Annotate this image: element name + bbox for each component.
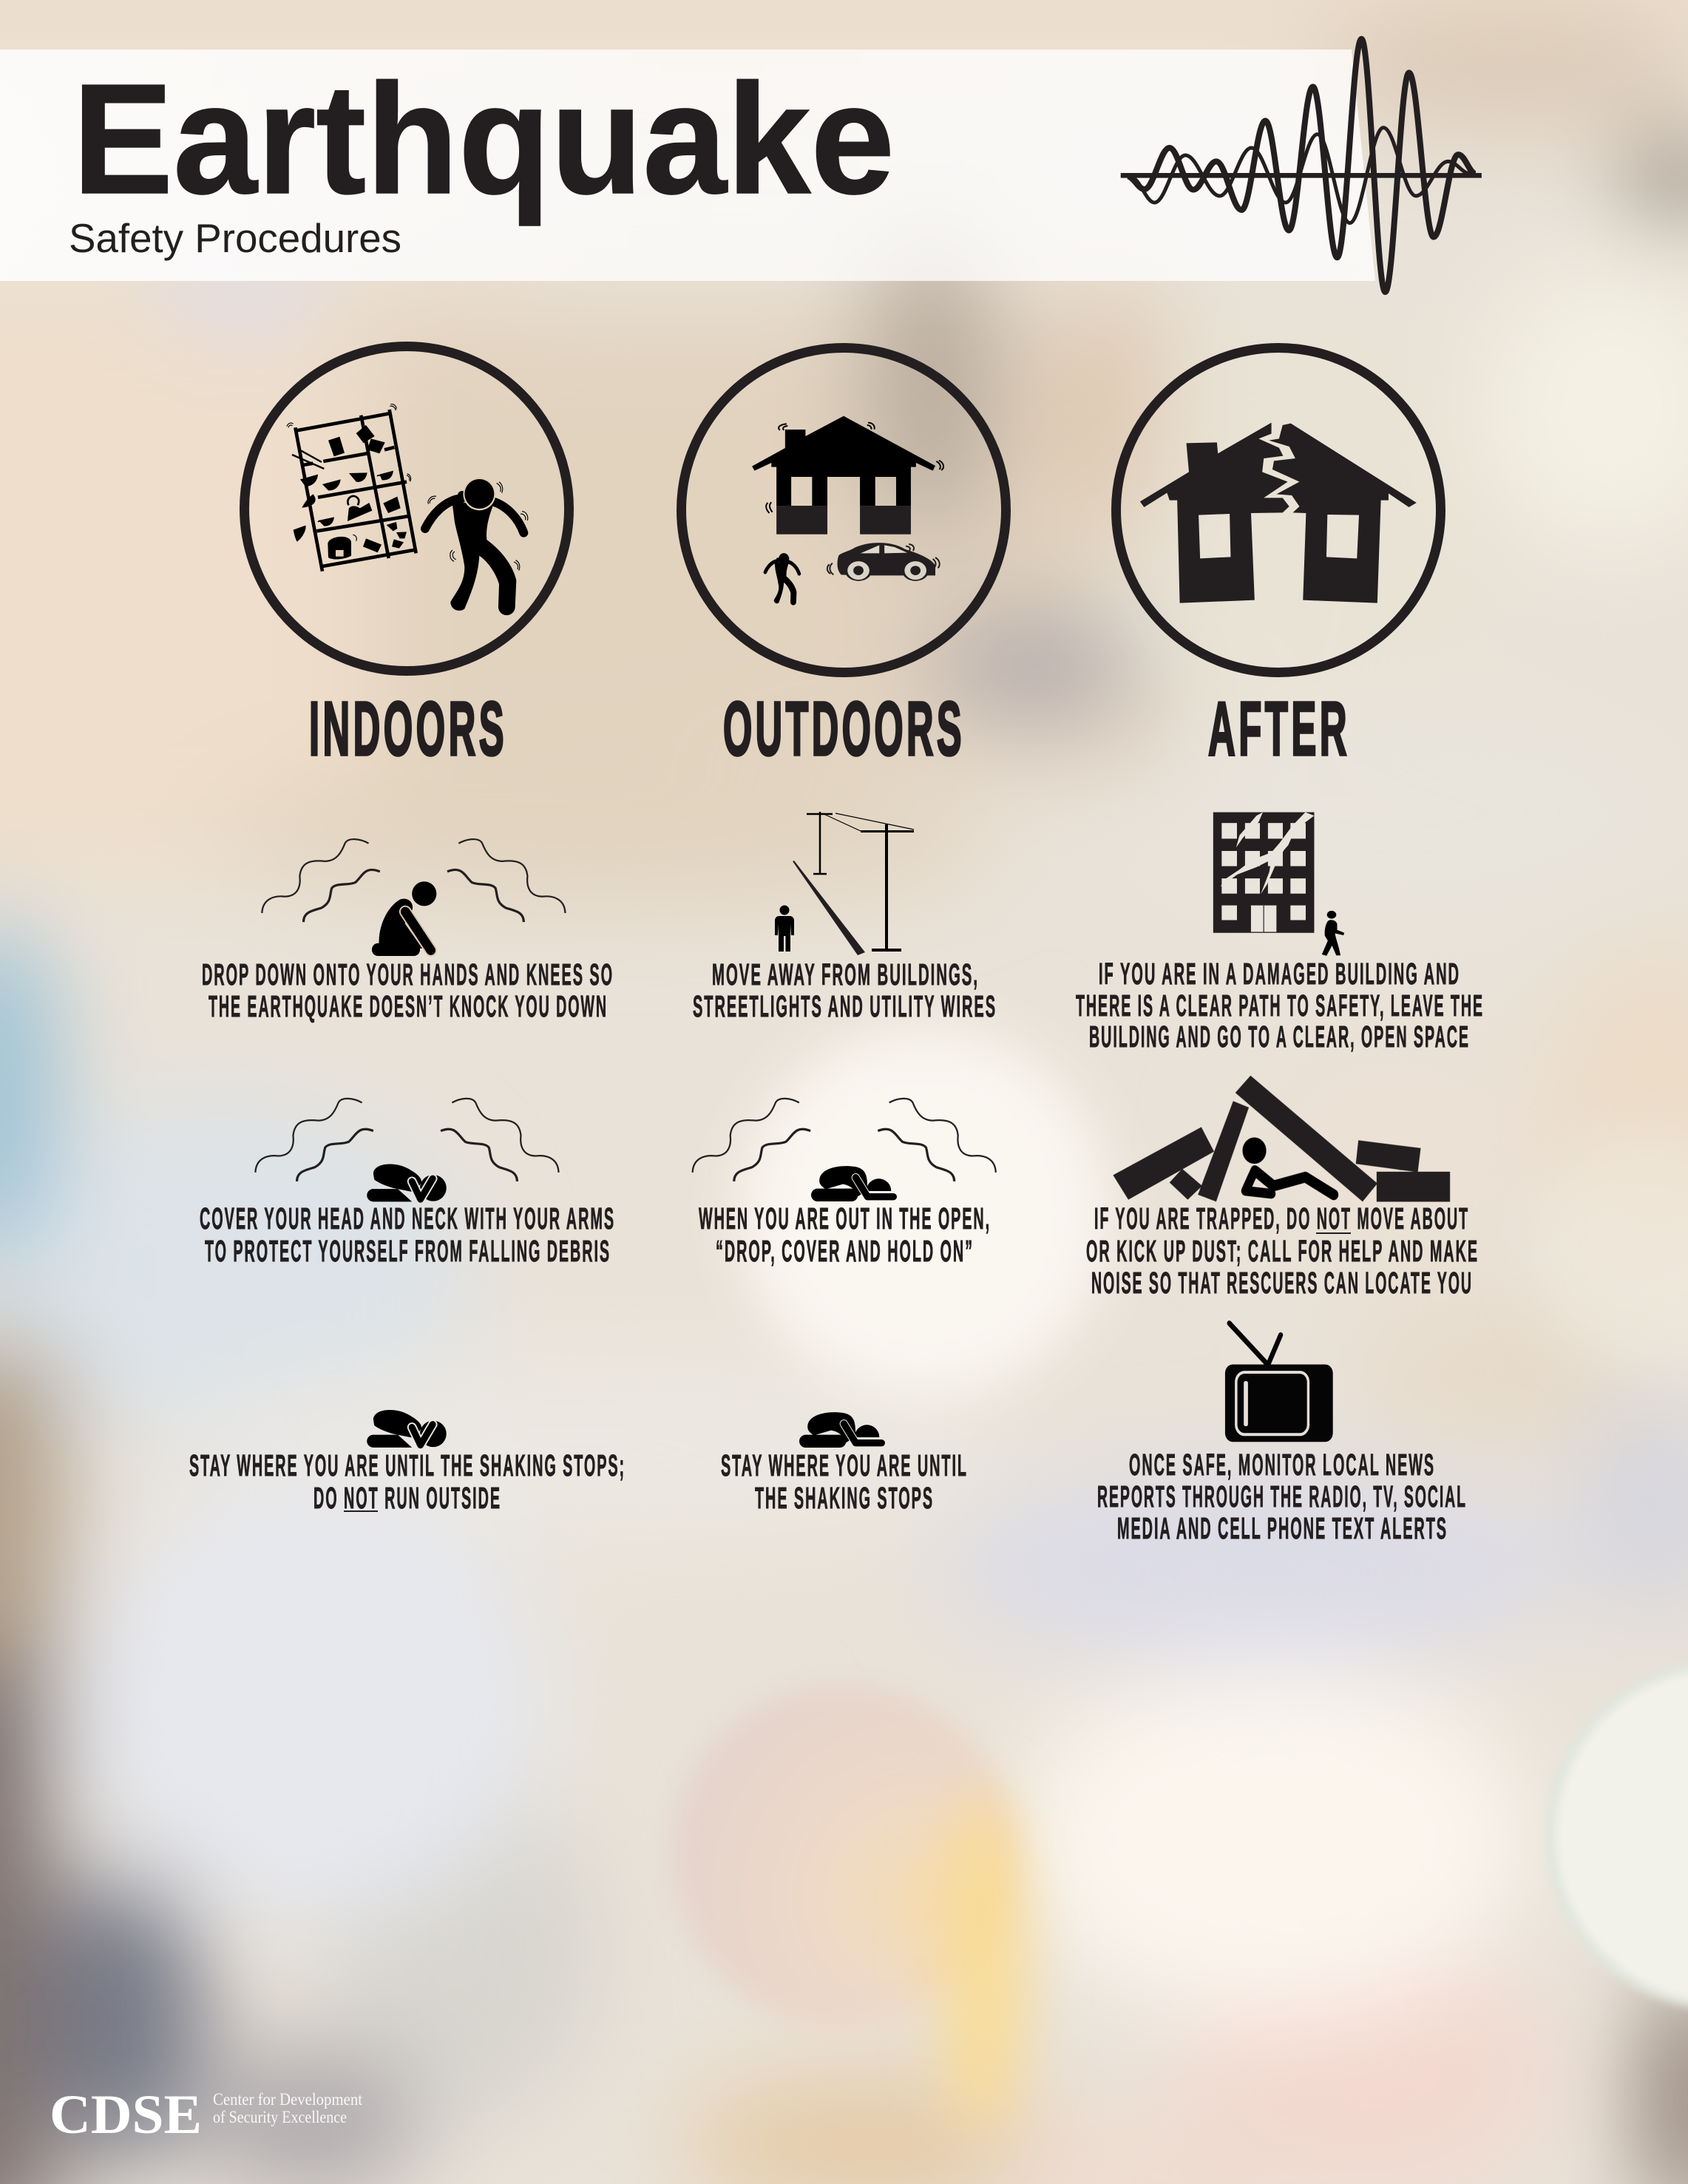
after step 1 — [1076, 813, 1484, 1054]
text: STREETLIGHTS AND UTILITY WIRES — [693, 989, 997, 1023]
text: stay until shaking stops — [721, 1448, 968, 1515]
text: INDOORS — [309, 686, 507, 771]
after step 2 — [1086, 1076, 1479, 1300]
icon: shaken person — [287, 404, 528, 615]
text: cover your head — [200, 1201, 615, 1268]
logo: CDSE: Center for Development — [213, 2090, 363, 2109]
text: WHEN YOU ARE OUT IN THE OPEN, — [699, 1201, 991, 1235]
icon: shaking house — [752, 416, 943, 535]
text: stay where you are: DO NOT RUN OUTSIDE — [313, 1481, 501, 1515]
icon: falling shelf — [292, 410, 416, 572]
text: AFTER — [1208, 686, 1350, 771]
icon: person in the open — [693, 1099, 996, 1201]
logo: CDSE: of Security Excellence — [213, 2108, 347, 2126]
text: OUTDOORS — [723, 686, 965, 771]
outdoors step 2 — [693, 1099, 996, 1268]
panel: indoors icon circle — [244, 346, 569, 671]
text: monitor local news — [1097, 1448, 1467, 1545]
logo: CDSE — [50, 2084, 363, 2146]
subtitle: Safety Procedures — [69, 215, 401, 261]
indoors step 1 — [202, 839, 614, 1023]
text: STAY WHERE YOU ARE UNTIL THE SHAKING STOPS; — [189, 1448, 626, 1482]
icon: seismograph wave — [1121, 39, 1482, 292]
text: when in the open — [699, 1201, 991, 1268]
text: stay until shaking stops: THE SHAKING STOPS — [755, 1481, 934, 1515]
panel: after icon circle — [1116, 347, 1440, 673]
outdoors step 1 — [693, 812, 997, 1023]
icon: person staying down — [367, 1410, 447, 1448]
text: move away: MOVE AWAY FROM BUILDINGS, — [712, 957, 979, 991]
text: stay where you are — [189, 1448, 626, 1515]
indoors step 2 — [200, 1099, 615, 1268]
text: DROP DOWN ONTO YOUR HANDS AND KNEES SO — [202, 957, 614, 991]
icon: person dropping to knees — [262, 839, 565, 956]
text: drop down — [202, 957, 614, 1023]
indoors step 3 — [189, 1410, 626, 1515]
icon: trapped person under rubble — [1113, 1076, 1450, 1201]
panel: outdoors icon circle — [682, 347, 1006, 673]
icon: small shaken person — [765, 553, 799, 606]
icon: cracked house — [1140, 423, 1417, 603]
text: STAY WHERE YOU ARE UNTIL — [721, 1448, 968, 1482]
text: if trapped — [1086, 1201, 1479, 1300]
logo: CDSE: CDSE — [50, 2084, 202, 2146]
text: TO PROTECT YOURSELF FROM FALLING DEBRIS — [205, 1234, 611, 1268]
after step 3 — [1097, 1323, 1467, 1545]
title: Earthquake — [72, 51, 895, 226]
icon: damaged building and walking person — [1213, 813, 1344, 956]
icon: person staying down outdoors — [799, 1412, 881, 1448]
icon: fallen utility pole and person — [775, 812, 914, 955]
icon: car — [827, 543, 940, 580]
text: move away — [693, 957, 997, 1023]
text: when in the open: “DROP, COVER AND HOLD ON” — [716, 1234, 974, 1268]
title banner — [0, 50, 1375, 281]
text: THE EARTHQUAKE DOESN’T KNOCK YOU DOWN — [209, 989, 608, 1023]
icon: person covering head — [255, 1099, 559, 1201]
outdoors step 3 — [721, 1412, 968, 1515]
icon: television — [1225, 1323, 1333, 1442]
text: damaged building — [1076, 957, 1484, 1054]
text: COVER YOUR HEAD AND NECK WITH YOUR ARMS — [200, 1201, 615, 1235]
